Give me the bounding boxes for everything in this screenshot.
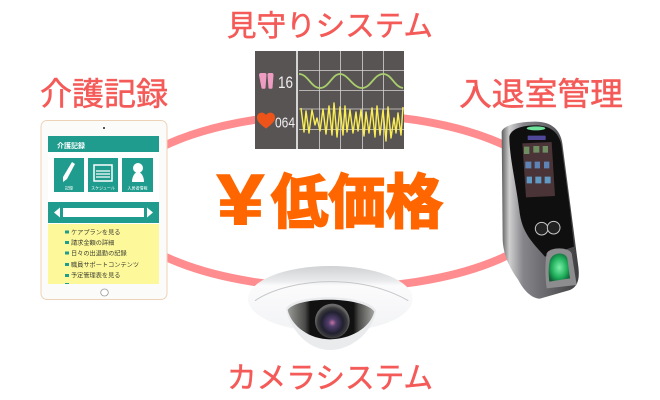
dome glass <box>286 297 376 350</box>
access control device <box>502 122 579 299</box>
menu list: 日々の出退勤の記録 <box>71 250 127 258</box>
black face <box>509 125 574 257</box>
value: 064: 064 <box>275 114 295 132</box>
lens <box>315 304 350 338</box>
fingerprint sensor <box>545 248 577 288</box>
menu list: 予定管理表を見る <box>71 272 120 280</box>
tile: resident <box>122 158 153 192</box>
menu list: 請求金額の詳細 <box>71 239 114 247</box>
headline: ¥低価格: 低価格 <box>271 170 443 236</box>
connecting ring <box>114 114 556 288</box>
tile: schedule: スケジュール <box>91 184 115 190</box>
title: 入退室管理: 入退室管理 <box>459 76 623 112</box>
icon: feet <box>259 73 274 89</box>
tile: pen: 記録 <box>65 184 73 190</box>
status light <box>527 126 545 130</box>
monitor: vital signs <box>255 51 404 149</box>
menu list <box>48 224 159 284</box>
value: 16: 16 <box>278 74 293 92</box>
tile: schedule <box>88 158 118 192</box>
green wave <box>299 74 403 88</box>
headline: ¥低価格: ¥ <box>217 161 265 240</box>
dome camera <box>248 266 413 350</box>
touch screen <box>522 142 555 197</box>
headline: ¥低価格 <box>217 161 443 240</box>
title: カメラシステム: カメラシステム <box>227 362 433 395</box>
flange <box>248 266 413 332</box>
title: 介護記録: 介護記録 <box>40 76 168 112</box>
tablet screen <box>48 136 159 284</box>
yellow wave <box>301 103 403 141</box>
logo plate <box>528 136 546 140</box>
title: 見守りシステム: 見守りシステム <box>227 10 433 43</box>
tablet body <box>41 120 167 300</box>
icon: heart <box>257 113 275 128</box>
tablet: care records <box>41 120 167 300</box>
tablet screen: 介護記録 <box>57 141 85 150</box>
tile: resident: 入居者情報 <box>128 184 148 190</box>
device body <box>502 122 579 299</box>
grid <box>299 51 404 149</box>
slider band <box>48 202 159 223</box>
dark housing <box>288 300 374 339</box>
tile: pen <box>54 158 84 192</box>
dual camera rings <box>535 221 560 235</box>
menu list: 職員サポートコンテンツ <box>71 261 139 269</box>
menu list: ケアプランを見る <box>71 230 120 236</box>
